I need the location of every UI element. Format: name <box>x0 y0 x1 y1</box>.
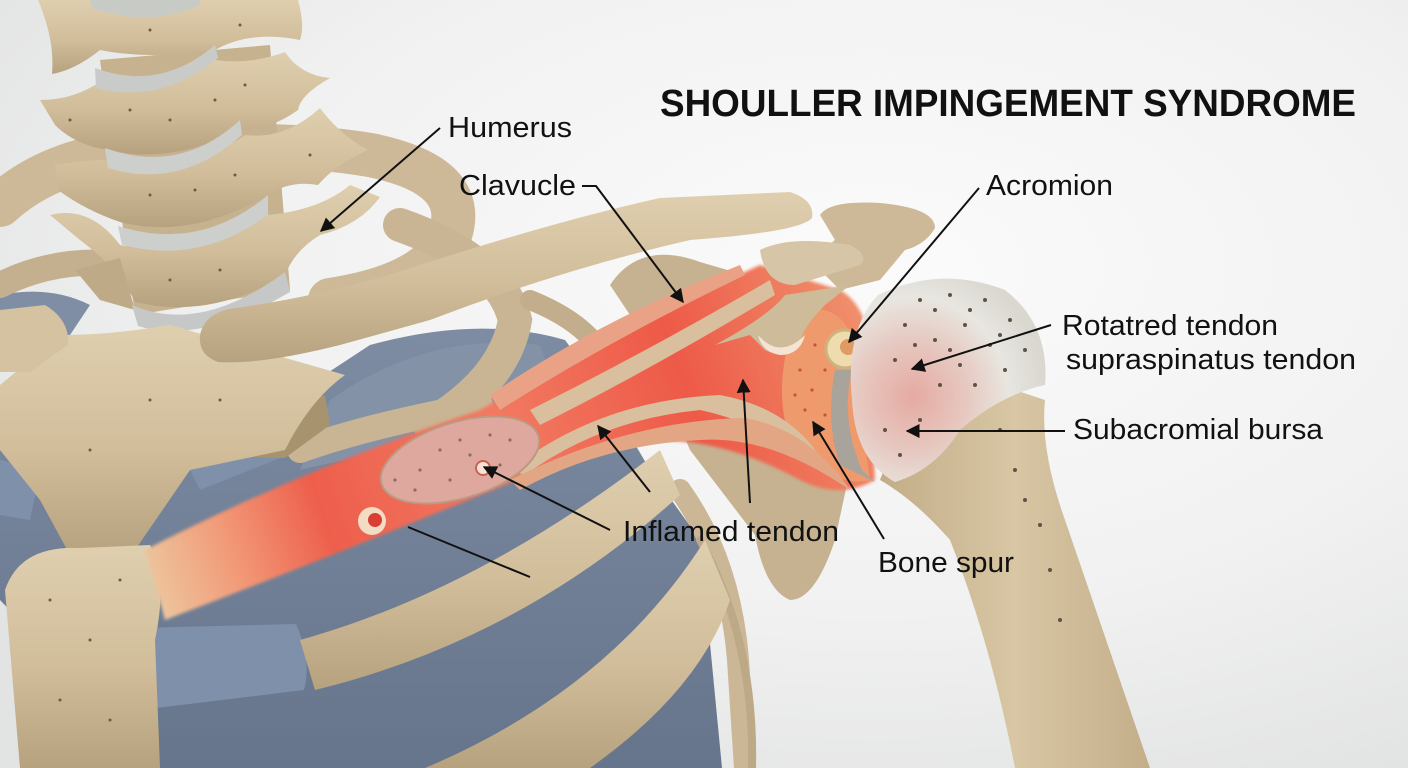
acromion process and bone spur <box>715 241 864 368</box>
label: Subacromial bursa: Subacromial bursa <box>1073 414 1324 446</box>
title: SHOULLER IMPINGEMENT SYNDROME <box>660 83 1356 125</box>
lower sternal bones <box>5 398 730 768</box>
fibrous tendon insertion <box>831 370 875 482</box>
label: Acromion <box>849 170 1113 342</box>
label: Humerus <box>321 112 572 231</box>
sternum and first rib <box>0 325 345 555</box>
label: Clavucle: Clavucle <box>459 170 576 202</box>
spine: cervical and thoracic vertebrae <box>38 0 380 458</box>
inflamed bursa with speckles <box>370 400 550 520</box>
label: Bone spur <box>813 422 1014 579</box>
label: Rotatred tendon supraspinatus tendon: supraspinatus tendon <box>1066 344 1356 376</box>
humerus <box>851 279 1150 768</box>
back ribs <box>0 146 752 768</box>
inflamed tendon <box>145 265 875 620</box>
label: Bone spur: Bone spur <box>878 547 1014 579</box>
label: Acromion: Acromion <box>986 170 1113 202</box>
label: Inflamed tendon <box>408 380 839 577</box>
label: Humerus: Humerus <box>448 112 572 144</box>
inflamed spot <box>358 507 386 535</box>
scapula <box>610 255 860 600</box>
label: Rotatred tendon supraspinatus tendon: Rotatred tendon <box>1062 310 1278 342</box>
label: Clavucle <box>459 170 683 302</box>
label: Rotatred tendon supraspinatus tendon <box>912 310 1356 376</box>
clavicle <box>200 192 812 362</box>
rib cage body <box>0 292 722 768</box>
label: Inflamed tendon: Inflamed tendon <box>623 516 839 548</box>
acromion <box>810 202 935 290</box>
